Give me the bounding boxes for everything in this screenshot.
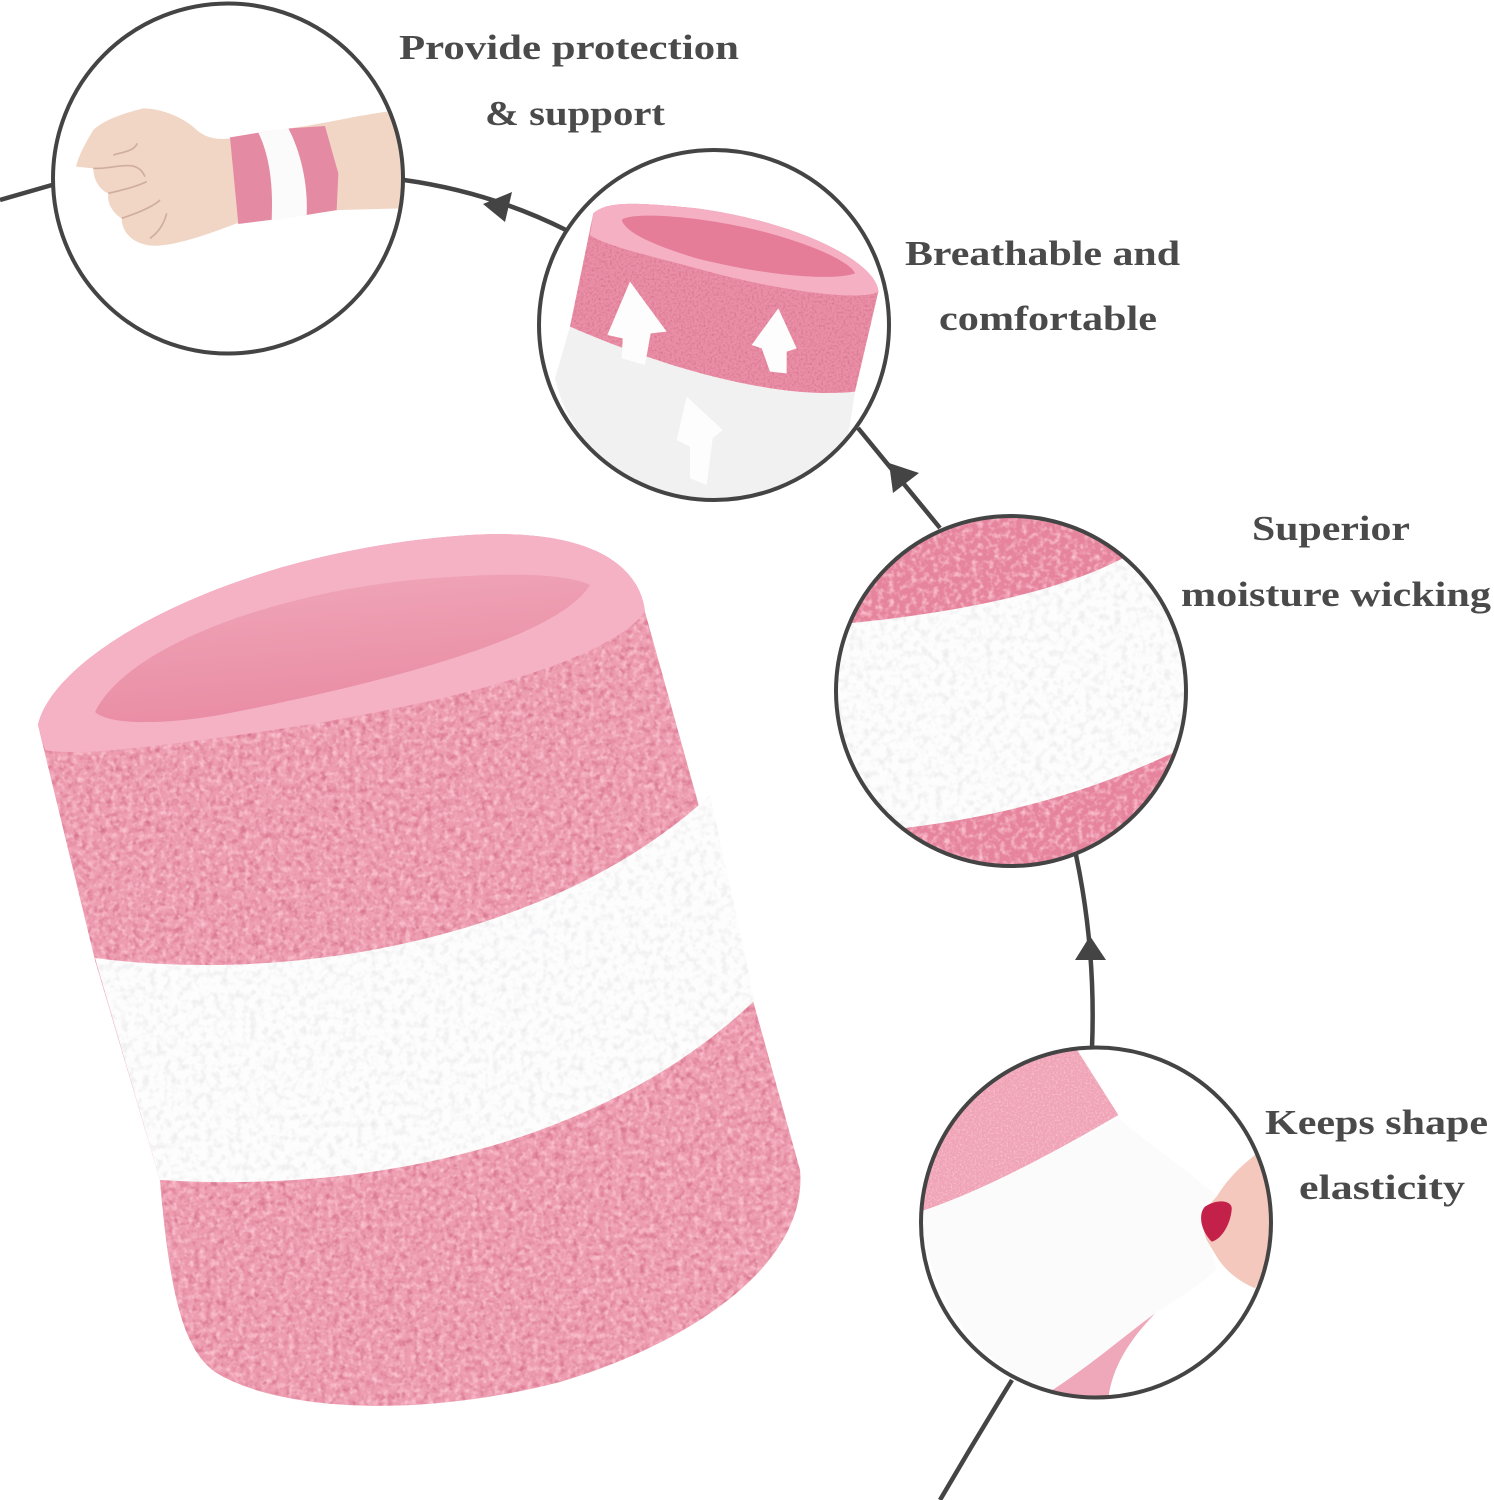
wrist photo [76, 108, 403, 246]
band on wrist [230, 126, 338, 224]
connecting curve with arrows [0, 180, 1093, 1500]
fabric close-up [838, 518, 1184, 864]
circle outline [539, 150, 889, 500]
pink section texture [570, 204, 878, 393]
hand [76, 108, 403, 246]
label: keeps shape elasticity: elasticity [1299, 1168, 1466, 1207]
label: protection and support: Provide protection [399, 28, 739, 67]
pink top fabric [917, 1047, 1118, 1212]
wristband light texture [38, 534, 800, 1406]
arrow: to protection [483, 192, 512, 222]
detail circle: moisture wicking [830, 510, 1195, 875]
label: protection and support: & support [485, 94, 665, 133]
fingers [1203, 1155, 1273, 1288]
white stripe [95, 795, 755, 1182]
pink texture [854, 518, 1172, 864]
red nail [1201, 1201, 1232, 1242]
label: keeps shape elasticity: Keeps shape [1265, 1103, 1488, 1142]
pink bottom fabric [1050, 1313, 1155, 1398]
finger creases [93, 143, 167, 238]
label: breathable and comfortable: comfortable [939, 299, 1157, 338]
airflow arrow right [752, 308, 797, 373]
label: superior moisture wicking [1181, 509, 1492, 614]
label: keeps shape elasticity [1265, 1103, 1488, 1207]
detail circle: elasticity [917, 1047, 1273, 1398]
wristband inner hole [95, 575, 590, 722]
pink section [570, 204, 878, 393]
detail circle: breathable [539, 150, 889, 502]
inner hole [622, 216, 855, 277]
white stripe texture [95, 795, 755, 1182]
pink rim [590, 204, 878, 296]
airflow arrow bottom [677, 397, 723, 485]
white stripe on wrist band [258, 128, 307, 221]
circle outline [53, 4, 403, 354]
label: breathable and comfortable [905, 234, 1181, 338]
stretch photo [917, 1047, 1273, 1398]
wristband rim [38, 534, 645, 752]
circle outline [921, 1048, 1271, 1398]
breathable photo [555, 204, 878, 502]
wristband dark texture [38, 534, 800, 1406]
label: superior moisture wicking: Superior [1252, 509, 1410, 548]
pink fabric [852, 518, 1172, 864]
airflow arrow left [607, 282, 667, 365]
detail circle: wrist [53, 4, 403, 354]
label: breathable and comfortable: Breathable and [905, 234, 1181, 273]
white section [555, 327, 855, 502]
arrow: to moisture wicking [1075, 936, 1106, 960]
circle outline [836, 516, 1186, 866]
label: superior moisture wicking: moisture wicking [1181, 575, 1492, 614]
arrow: to breathable [889, 463, 919, 493]
white fabric [830, 545, 1195, 828]
label: protection and support [399, 28, 739, 133]
white texture [838, 562, 1184, 828]
white stretched fabric [924, 1184, 988, 1210]
pink top texture [917, 1047, 1118, 1212]
wristband pink body [38, 534, 800, 1406]
main wristband product [38, 534, 800, 1406]
